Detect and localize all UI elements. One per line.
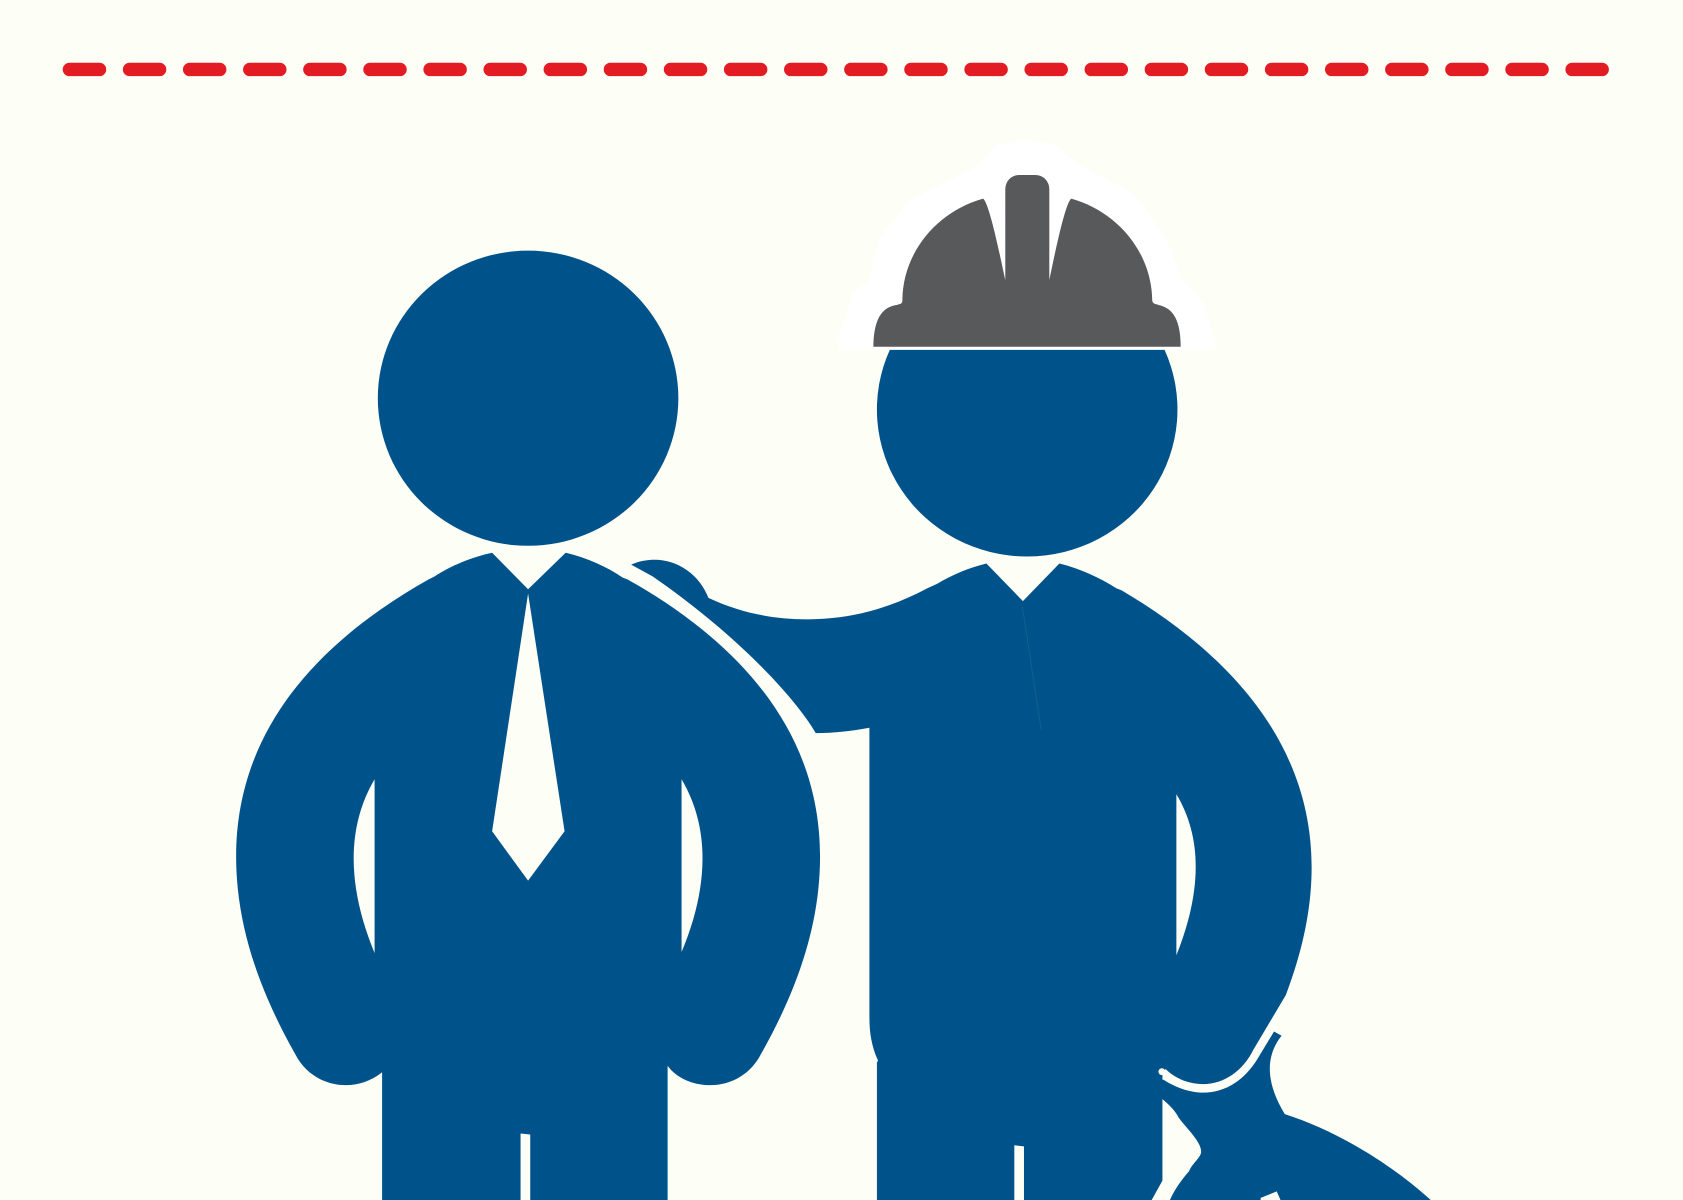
figure: construction worker with hard hat	[631, 140, 1431, 1200]
bag highlight	[1261, 1191, 1280, 1200]
rounded end of gap between hand and bag	[1158, 1068, 1165, 1075]
head: businessperson	[378, 251, 678, 546]
body: worker with arm on shoulder	[631, 560, 1312, 1200]
bag carried at side	[1073, 1031, 1431, 1200]
body: businessperson suit	[236, 553, 820, 1200]
hard hat	[873, 175, 1181, 347]
left arm gap	[354, 779, 375, 953]
hard hat white halo	[838, 140, 1216, 350]
faint shirt seam	[1022, 606, 1041, 730]
head: construction worker	[877, 350, 1177, 557]
arm gap	[1176, 794, 1196, 955]
right arm gap	[682, 779, 703, 952]
necktie	[492, 594, 565, 881]
wedge between leg and bag	[1152, 1099, 1201, 1200]
figure: businessperson with tie	[236, 251, 820, 1200]
red dashed divider	[69, 63, 1602, 76]
